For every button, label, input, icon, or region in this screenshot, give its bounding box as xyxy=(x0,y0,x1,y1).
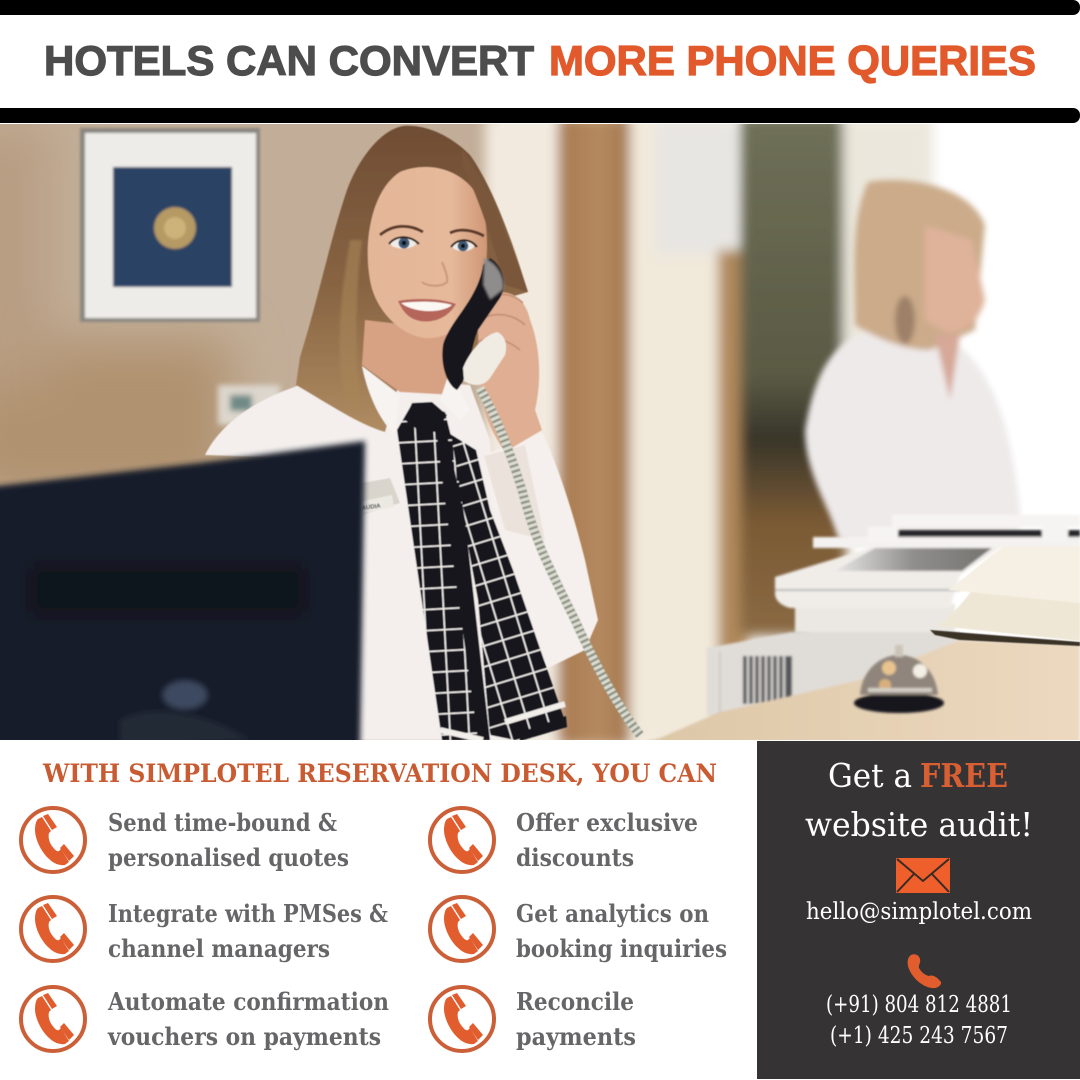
feature: reconcile payments: Reconcile xyxy=(516,987,634,1016)
foreground computer monitor xyxy=(0,441,365,750)
feature: exclusive discounts: discounts xyxy=(516,843,634,872)
picture frame on the wall xyxy=(80,128,260,322)
sleeve xyxy=(483,432,598,668)
open book xyxy=(930,546,1080,646)
nose xyxy=(422,262,447,286)
hair front right strand xyxy=(473,190,528,292)
photo background: wall and columns xyxy=(0,124,937,740)
audit heading: website audit! xyxy=(805,805,1033,844)
feature: analytics: Get analytics on xyxy=(516,899,709,928)
icon: phone xyxy=(908,954,941,988)
receptionist xyxy=(205,126,640,741)
feature: time-bound quotes: personalised quotes xyxy=(108,843,349,872)
feature: PMS integration: channel managers xyxy=(108,934,330,963)
feature: automate vouchers: Automate confirmation xyxy=(107,987,389,1016)
feature: time-bound quotes xyxy=(21,808,349,872)
feature: automate vouchers: vouchers on payments xyxy=(107,1022,381,1051)
second black bar xyxy=(0,108,1080,123)
collar xyxy=(361,366,397,426)
title: MORE PHONE QUERIES xyxy=(549,37,1036,84)
phone cord xyxy=(480,388,640,735)
feature: PMS integration: Integrate with PMSes & xyxy=(108,899,388,928)
feature: exclusive discounts: Offer exclusive xyxy=(516,808,698,837)
panel: free website audit xyxy=(757,741,1080,1079)
phone numbers: (+91) 804 812 4881 xyxy=(826,992,1012,1018)
neck xyxy=(362,320,455,395)
feature: analytics: booking inquiries xyxy=(516,934,727,963)
shirt body xyxy=(205,380,520,740)
feature: reconcile payments xyxy=(430,987,636,1051)
hair back xyxy=(296,126,528,432)
small frame xyxy=(218,385,280,425)
phone numbers xyxy=(826,992,1012,1049)
feature: PMS integration xyxy=(21,897,388,963)
audit heading: Get a xyxy=(828,756,912,795)
feature: reconcile payments: payments xyxy=(516,1022,636,1051)
printer xyxy=(707,515,1080,716)
feature: automate vouchers xyxy=(21,987,389,1051)
name badge: AUDIA xyxy=(361,503,382,512)
face xyxy=(368,167,487,338)
title: HOTELS CAN CONVERT xyxy=(44,37,534,84)
counter xyxy=(630,640,1080,745)
colleague in background xyxy=(805,180,1020,540)
eyes xyxy=(389,237,477,251)
heading: features: WITH SIMPLOTEL RESERVATION DESK, YOU CAN xyxy=(42,759,717,788)
scarf xyxy=(397,402,567,741)
email address: hello@simplotel.com xyxy=(806,899,1032,925)
hand xyxy=(478,292,542,452)
feature: exclusive discounts xyxy=(430,808,698,872)
phone handset xyxy=(442,258,504,390)
top black bar xyxy=(0,0,1080,15)
audit heading xyxy=(805,756,1033,844)
eyebrows xyxy=(380,226,423,235)
feature: time-bound quotes: Send time-bound & xyxy=(108,808,337,837)
mouth xyxy=(398,299,456,322)
icon: envelope xyxy=(896,858,950,893)
audit heading: FREE xyxy=(920,756,1008,795)
panel: features xyxy=(21,759,727,1051)
feature: analytics xyxy=(430,897,727,963)
photo: receptionist on the phone at hotel front desk xyxy=(0,116,1080,750)
phone numbers: (+1) 425 243 7567 xyxy=(830,1023,1008,1049)
name badge xyxy=(362,478,400,514)
title xyxy=(44,37,1036,84)
desk bell xyxy=(854,645,944,713)
